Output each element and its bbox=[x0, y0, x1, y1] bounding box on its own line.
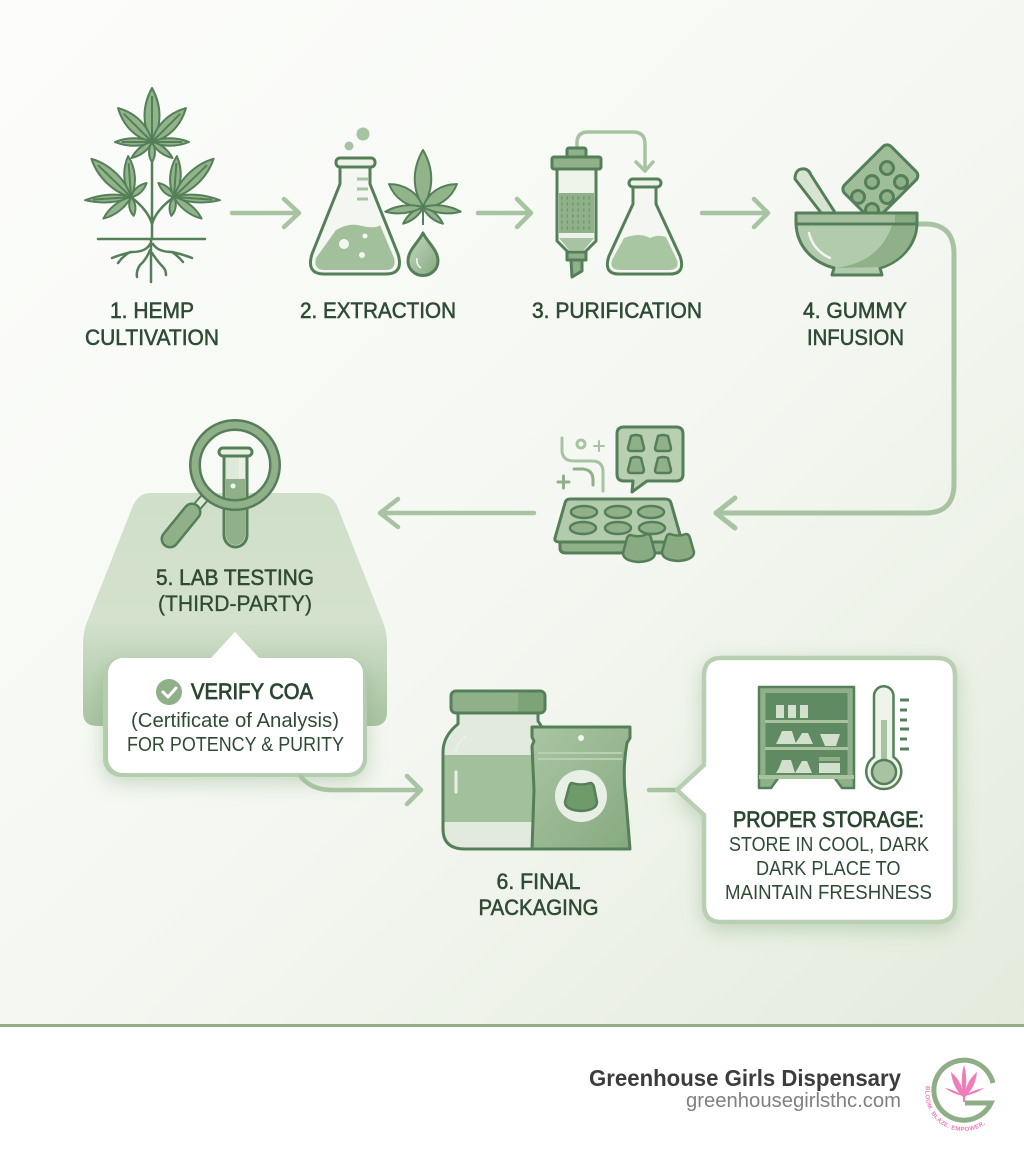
icon: gummy mold tray bbox=[555, 427, 694, 562]
step 1: hemp cultivation bbox=[85, 88, 220, 350]
icon: magnifier over test tube bbox=[170, 425, 275, 547]
arrow: step 2 to 3 bbox=[478, 199, 531, 227]
arrow: step 1 to 2 bbox=[232, 199, 299, 227]
callout text: (Certificate of Analysis) bbox=[131, 710, 339, 732]
label: final packaging: 6. FINAL bbox=[496, 869, 580, 894]
callout text: VERIFY COA bbox=[191, 679, 313, 704]
panel background bbox=[83, 493, 387, 726]
step 6: final packaging bbox=[443, 691, 630, 920]
connector: step 4 to mold bbox=[716, 224, 954, 528]
arrow: mold to lab testing bbox=[380, 499, 534, 527]
icon: check badge bbox=[156, 679, 182, 705]
callout text: STORE IN COOL, DARK bbox=[729, 834, 930, 856]
callout text: DARK PLACE TO bbox=[756, 858, 900, 880]
callout text: MAINTAIN FRESHNESS bbox=[725, 882, 932, 904]
connector: packaging to storage bbox=[649, 788, 678, 792]
footer brand text: greenhousegirlsthc.com bbox=[686, 1090, 901, 1112]
footer brand text: Greenhouse Girls Dispensary bbox=[589, 1065, 901, 1091]
step 4: gummy infusion bbox=[795, 142, 920, 350]
icon: column and flask bbox=[552, 132, 682, 277]
label: hemp cultivation: 1. HEMP bbox=[110, 298, 194, 323]
label: lab testing: 5. LAB TESTING bbox=[156, 565, 314, 590]
step 2: extraction bbox=[300, 128, 461, 323]
callout text bbox=[725, 807, 932, 904]
callout text bbox=[127, 679, 344, 756]
step 3: purification bbox=[532, 132, 702, 323]
label: hemp cultivation: CULTIVATION bbox=[85, 325, 219, 350]
label: gummy infusion bbox=[803, 298, 907, 350]
label: purification: 3. PURIFICATION bbox=[532, 298, 702, 323]
label: lab testing bbox=[156, 565, 314, 616]
callout: proper storage bbox=[677, 658, 955, 922]
label: final packaging bbox=[478, 869, 598, 920]
icon: flask with leaf and drop bbox=[310, 128, 461, 276]
footer band bbox=[0, 1024, 1024, 1154]
icon: thermometer bbox=[866, 686, 909, 789]
label: gummy infusion: INFUSION bbox=[807, 325, 904, 350]
label: extraction: 2. EXTRACTION bbox=[300, 298, 456, 323]
logo bbox=[925, 1058, 996, 1131]
icon: bowl with spoon and blister pack bbox=[795, 142, 920, 275]
callout text: FOR POTENCY & PURITY bbox=[127, 734, 344, 756]
label: lab testing: (THIRD-PARTY) bbox=[158, 591, 312, 616]
callout text: PROPER STORAGE: bbox=[733, 807, 924, 832]
icon: storage shelf bbox=[759, 687, 854, 788]
label: final packaging: PACKAGING bbox=[478, 895, 598, 920]
label: hemp cultivation bbox=[85, 298, 219, 350]
arrow: step 3 to 4 bbox=[702, 199, 768, 227]
icon: jar and pouch bbox=[443, 691, 630, 849]
arrow: lab testing to packaging bbox=[301, 776, 421, 804]
callout: verify coa bbox=[103, 632, 367, 777]
label: gummy infusion: 4. GUMMY bbox=[803, 298, 907, 323]
footer brand text bbox=[589, 1065, 901, 1112]
icon: hemp plant bbox=[85, 88, 220, 282]
logo: BLOOM. BLAZE. EMPOWER. bbox=[925, 1086, 985, 1131]
panel: lab testing bbox=[83, 425, 387, 777]
